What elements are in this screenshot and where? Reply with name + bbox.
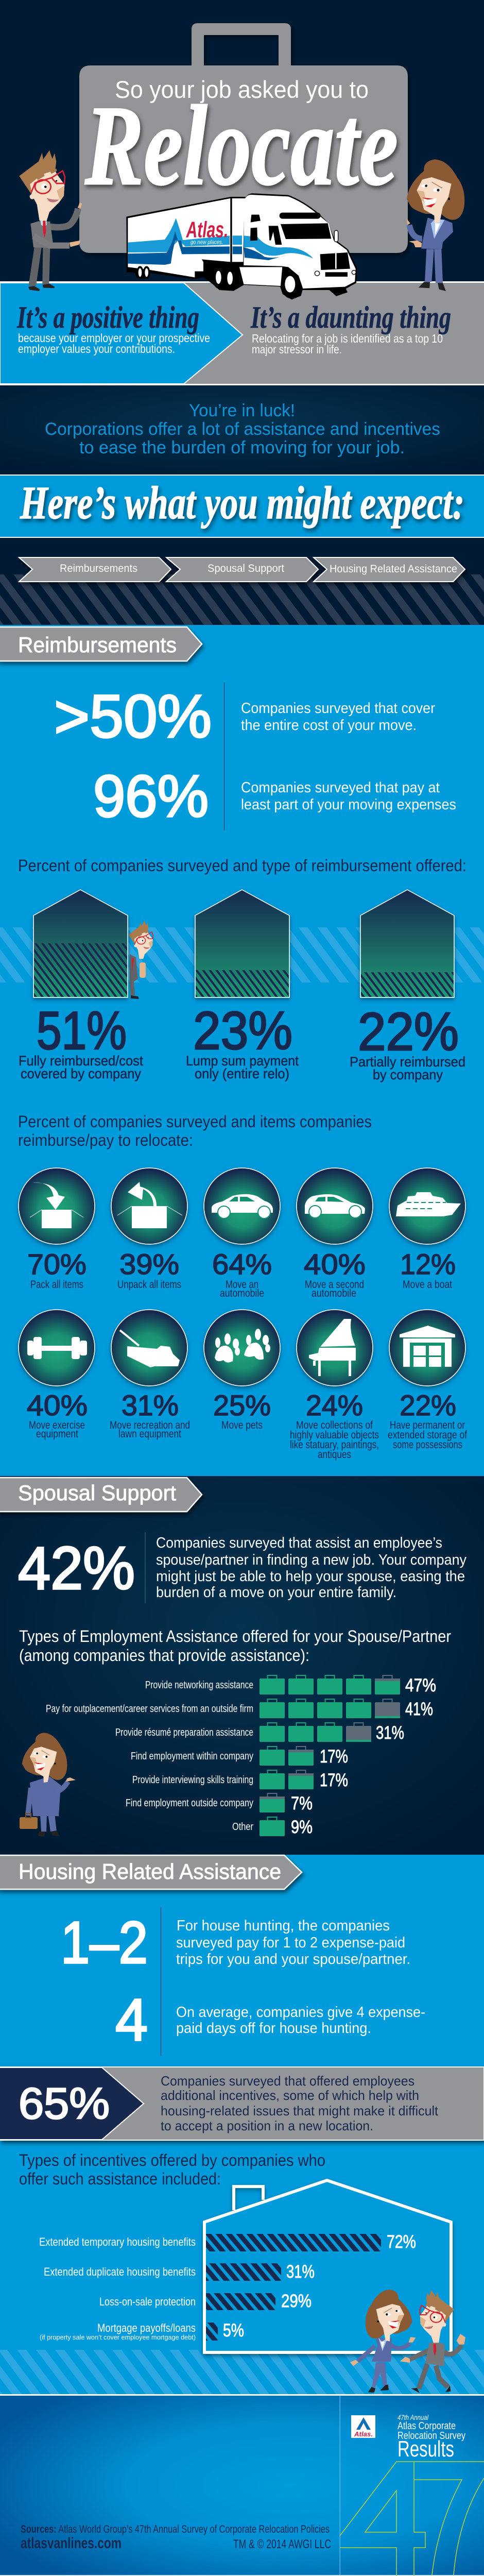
stat: 1–2 trips xyxy=(61,1910,410,1976)
item: move collections of valuables: Move collections of xyxy=(296,1419,373,1431)
item: unpack all items: Unpack all items xyxy=(117,1279,181,1291)
row: outside company 7%: 7% xyxy=(291,1793,313,1814)
bar: 29% xyxy=(99,2291,312,2311)
text: copyright: TM & © 2014 AWGI LLC xyxy=(233,2537,331,2551)
icon: Atlas moving truck: go new places. xyxy=(191,239,223,245)
item: move an automobile: automobile xyxy=(220,1287,264,1299)
row: other 9%: Other xyxy=(232,1821,253,1833)
icon: dumbbell xyxy=(27,1337,87,1359)
chevron: Housing Related Assistance: Housing Related Assistance xyxy=(330,563,457,575)
stat: 1–2 trips: For house hunting, the companies xyxy=(177,1918,390,1934)
stat: 4 days: 4 xyxy=(115,1987,148,2053)
row: networking 47%: Provide networking assistance xyxy=(145,1680,253,1691)
character: man with red glasses xyxy=(19,150,82,291)
stat: 1–2 trips: surveyed pay for 1 to 2 expense-paid xyxy=(176,1935,405,1951)
icon: paws xyxy=(215,1329,270,1363)
stat: 42% xyxy=(18,1532,466,1603)
section heading: Spousal Support xyxy=(0,1478,202,1512)
row: within company 17%: Find employment within company xyxy=(131,1751,253,1762)
bar: 5%: Mortgage payoffs/loans xyxy=(97,2321,196,2334)
section heading: Reimbursements xyxy=(0,627,202,661)
icon: Atlas logo xyxy=(351,2415,375,2438)
panel: 65% incentives: to accept a position in a new location. xyxy=(161,2118,373,2133)
text: survey title: 47th Annual xyxy=(397,2413,429,2421)
item: move exercise equipment: 40% xyxy=(27,1389,88,1421)
bar: 31%: 31% xyxy=(286,2262,315,2282)
bar: 29%: 29% xyxy=(281,2291,312,2311)
decorative stripes behind houses xyxy=(0,927,484,982)
row: within company 17%: 17% xyxy=(320,1747,348,1767)
stat: 96%: least part of your moving expenses xyxy=(241,796,456,813)
item: move collections of valuables: 24% xyxy=(306,1389,363,1421)
item: pack all items xyxy=(19,1168,95,1291)
section heading: Reimbursements: Reimbursements xyxy=(18,633,177,657)
row: outplacement 41%: Pay for outplacement/career services from an outside firm xyxy=(46,1703,253,1715)
bar: 5%: 5% xyxy=(223,2320,244,2341)
text: It's a positive thing: It’s a positive thing xyxy=(16,300,199,334)
stat: 4 days xyxy=(115,1987,425,2053)
row: other 9%: 9% xyxy=(291,1817,313,1837)
item: move recreation and lawn equipment: lawn equipment xyxy=(118,1428,181,1440)
item: move an automobile: Move an xyxy=(226,1279,258,1291)
item: permanent or extended storage: extended storage of xyxy=(388,1429,467,1441)
item: unpack all items: 39% xyxy=(119,1248,179,1280)
text: sources: Sources: Atlas World Group’s 47th Annual Survey of Corporate Relocation Policies xyxy=(21,2523,330,2535)
item: move recreation and lawn equipment: 31% xyxy=(122,1389,179,1421)
icon: Atlas moving truck xyxy=(127,194,356,299)
text: survey title xyxy=(397,2413,465,2462)
heading: items companies pay for: reimburse/pay to relocate: xyxy=(18,1131,193,1149)
stat: 42%: Companies surveyed that assist an employee’s xyxy=(156,1535,442,1551)
icon: Atlas logo: Atlas. xyxy=(354,2430,373,2438)
icon: warehouse xyxy=(400,1326,455,1367)
bar: 5%: (if property sale won’t cover employee mortgage debt) xyxy=(40,2333,196,2341)
panel: hero xyxy=(0,0,484,385)
stat: 4 days: On average, companies give 4 expense- xyxy=(176,2004,425,2021)
icon: boat xyxy=(396,1192,461,1216)
house chart: 23% xyxy=(186,890,299,1081)
item: move collections of valuables: highly valuable objects xyxy=(290,1429,379,1441)
heading: types of incentives: offer such assistance included: xyxy=(19,2170,221,2188)
row: interviewing 17% xyxy=(132,1770,348,1790)
icon: grand piano xyxy=(309,1319,356,1376)
icon: briefcase xyxy=(79,23,408,253)
stat: 42%: 42% xyxy=(18,1534,135,1602)
stat: 96%: 96% xyxy=(93,764,209,829)
stat: 42%: spouse/partner in finding a new job. Your company xyxy=(156,1552,466,1568)
text: It's a positive thing: because your employer or your prospective xyxy=(18,331,210,345)
text: It's a daunting thing xyxy=(250,300,451,356)
house chart: 22%: Partially reimbursed xyxy=(350,1054,465,1070)
character: woman with bag xyxy=(20,1733,76,1837)
item: move collections of valuables: like statuary, paintings, xyxy=(290,1439,379,1451)
stat: 42%: burden of a move on your entire family. xyxy=(156,1584,396,1601)
row: resume 31%: Provide résumé preparation assistance xyxy=(115,1727,253,1738)
heading: types of employment assistance xyxy=(19,1627,451,1665)
item: move a boat: 12% xyxy=(400,1248,456,1280)
row: outplacement 41%: 41% xyxy=(405,1699,433,1719)
item: move an automobile xyxy=(204,1168,280,1299)
item: move collections of valuables xyxy=(290,1310,379,1461)
stat: >50%: the entire cost of your move. xyxy=(241,717,417,734)
icon: sedan xyxy=(212,1194,273,1218)
bar: 31%: Extended duplicate housing benefits xyxy=(44,2265,196,2278)
item: permanent or extended storage xyxy=(388,1310,467,1451)
item: move a second automobile xyxy=(297,1168,373,1299)
house chart: 22% xyxy=(350,890,465,1082)
item: permanent or extended storage: some possessions xyxy=(393,1439,462,1451)
heading: types of incentives xyxy=(19,2151,325,2188)
panel: 65% incentives xyxy=(0,2067,484,2140)
item: move pets: Move pets xyxy=(221,1419,263,1431)
heading: types of employment assistance: Types of Employment Assistance offered for your Spouse/Partner xyxy=(19,1627,451,1646)
item: move an automobile: 64% xyxy=(212,1248,272,1280)
house chart: 22%: by company xyxy=(373,1067,443,1082)
row: networking 47%: 47% xyxy=(405,1675,436,1696)
panel: you're in luck: You’re in luck! xyxy=(189,401,295,420)
item: permanent or extended storage: 22% xyxy=(400,1389,456,1421)
panel: spousal support background xyxy=(0,1476,484,1855)
panel: navigation band xyxy=(0,538,484,625)
stat: >50%: >50% xyxy=(54,683,212,751)
heading: types of employment assistance: (among companies that provide assistance): xyxy=(19,1646,309,1665)
house chart: 51%: Fully reimbursed/cost xyxy=(19,1053,143,1069)
characters: walking couple xyxy=(350,2290,465,2393)
item: move exercise equipment xyxy=(19,1310,95,1440)
stat: 96%: Companies surveyed that pay at xyxy=(241,779,440,796)
decorative stripes at bottom xyxy=(0,2350,484,2394)
house chart: 23%: Lump sum payment xyxy=(186,1053,299,1069)
text: So your job asked you to: So your job asked you to xyxy=(115,76,369,103)
item: move a second automobile: 40% xyxy=(304,1248,366,1280)
row: resume 31%: 31% xyxy=(376,1723,404,1743)
panel: 65% incentives: additional incentives, some of which help with xyxy=(161,2088,419,2103)
row: interviewing 17%: 17% xyxy=(320,1770,348,1790)
section heading: Spousal Support: Spousal Support xyxy=(18,1481,176,1505)
text: It's a positive thing xyxy=(16,300,210,355)
heading: items companies pay for: Percent of companies surveyed and items companies xyxy=(18,1112,372,1131)
house chart: 51%: covered by company xyxy=(21,1066,141,1081)
icon: Atlas moving truck: Atlas. xyxy=(186,217,228,243)
item: move exercise equipment: equipment xyxy=(36,1428,78,1440)
item: move a second automobile: Move a second xyxy=(305,1279,364,1291)
panel: footer xyxy=(0,2394,484,2576)
chevron: Housing Related Assistance xyxy=(314,557,465,582)
text: survey title: Results xyxy=(397,2436,454,2462)
row: outside company 7% xyxy=(126,1793,313,1814)
navy arrow xyxy=(0,2067,144,2140)
stat: 42%: might just be able to help your spouse, easing the xyxy=(156,1568,465,1585)
bar: 5% xyxy=(40,2320,244,2341)
house chart: 51%: 51% xyxy=(37,1001,127,1061)
house chart: 51% xyxy=(19,890,143,1081)
text: website: atlasvanlines.com xyxy=(21,2535,122,2552)
heading: items companies pay for xyxy=(18,1112,372,1149)
section heading: Housing Related Assistance: Housing Related Assistance xyxy=(19,1859,281,1884)
item: move pets: 25% xyxy=(213,1389,271,1421)
text: It's a daunting thing: major stressor in life. xyxy=(252,343,342,356)
bar: 72%: 72% xyxy=(387,2232,416,2252)
stat: 1–2 trips: 1–2 xyxy=(61,1910,148,1976)
row: other 9% xyxy=(232,1817,313,1837)
item: permanent or extended storage: Have permanent or xyxy=(390,1419,465,1431)
icon: lawn mower xyxy=(120,1330,180,1367)
stat: >50%: Companies surveyed that cover xyxy=(241,700,435,717)
item: move recreation and lawn equipment: Move recreation and xyxy=(110,1419,190,1431)
house chart: 22%: 22% xyxy=(358,1002,459,1062)
blue arrow panel xyxy=(0,283,243,384)
item: unpack all items xyxy=(111,1168,187,1291)
row: outplacement 41% xyxy=(46,1699,433,1719)
chevron: Reimbursements xyxy=(19,557,171,582)
row: within company 17% xyxy=(131,1747,348,1767)
item: pack all items: 70% xyxy=(27,1248,87,1280)
bar: 72%: Extended temporary housing benefits xyxy=(39,2235,196,2248)
item: move pets xyxy=(204,1310,280,1431)
title: Relocate: Relocate xyxy=(84,82,398,209)
row: resume 31% xyxy=(115,1723,404,1743)
item: move a boat xyxy=(389,1168,465,1291)
character: peeking man xyxy=(128,921,153,999)
character: woman xyxy=(406,159,464,291)
heading: types of incentives: Types of incentives offered by companies who xyxy=(19,2151,325,2170)
pictogram chart: employment assistance xyxy=(46,1675,436,1837)
house chart: 23%: only (entire relo) xyxy=(195,1066,289,1081)
icon: hatchback xyxy=(305,1194,365,1218)
stat: >50% xyxy=(54,683,435,751)
row: outside company 7%: Find employment outside company xyxy=(126,1798,253,1809)
item: move recreation and lawn equipment xyxy=(110,1310,190,1440)
bar: 31% xyxy=(44,2262,315,2282)
bar: 29%: Loss-on-sale protection xyxy=(99,2295,196,2308)
row: interviewing 17%: Provide interviewing skills training xyxy=(132,1774,253,1786)
text: It's a daunting thing: Relocating for a job is identified as a top 10 xyxy=(252,332,443,345)
icon: box with arrow in xyxy=(30,1183,83,1228)
item: pack all items: Pack all items xyxy=(30,1279,83,1291)
stat: 4 days: paid days off for house hunting. xyxy=(176,2020,371,2037)
chevron: Spousal Support xyxy=(166,557,318,582)
bar: 72% xyxy=(39,2232,416,2252)
icon: box with arrow out xyxy=(117,1182,182,1228)
item: move a boat: Move a boat xyxy=(403,1279,452,1291)
row: networking 47% xyxy=(145,1675,436,1696)
text: It's a positive thing: employer values your contributions. xyxy=(18,342,175,355)
chart: house outline with incentive bars xyxy=(39,2180,451,2352)
text: survey title: Relocation Survey xyxy=(397,2430,465,2442)
panel: 65% incentives: Companies surveyed that offered employees xyxy=(161,2073,414,2089)
section heading: Housing Related Assistance xyxy=(0,1855,302,1889)
panel: 65% incentives: housing-related issues that might make it difficult xyxy=(161,2103,439,2119)
panel: you're in luck: Corporations offer a lot of assistance and incentives xyxy=(45,419,440,439)
panel: 65% incentives: 65% xyxy=(19,2079,110,2128)
chevron: Spousal Support: Spousal Support xyxy=(208,563,284,574)
text: survey title: Atlas Corporate xyxy=(397,2420,456,2432)
stat: 96% xyxy=(93,764,456,829)
chevron: Reimbursements: Reimbursements xyxy=(60,563,137,574)
panel: you're in luck: to ease the burden of moving for your job. xyxy=(79,438,405,457)
stat: 1–2 trips: trips for you and your spouse/partner. xyxy=(176,1951,410,1968)
house chart: 23%: 23% xyxy=(193,1001,292,1061)
panel: you're in luck xyxy=(0,385,484,476)
item: move a second automobile: automobile xyxy=(312,1287,356,1299)
graphic: outlined 47 xyxy=(340,2462,484,2576)
item: move collections of valuables: antiques xyxy=(318,1449,351,1461)
item: move exercise equipment: Move exercise xyxy=(29,1419,85,1431)
